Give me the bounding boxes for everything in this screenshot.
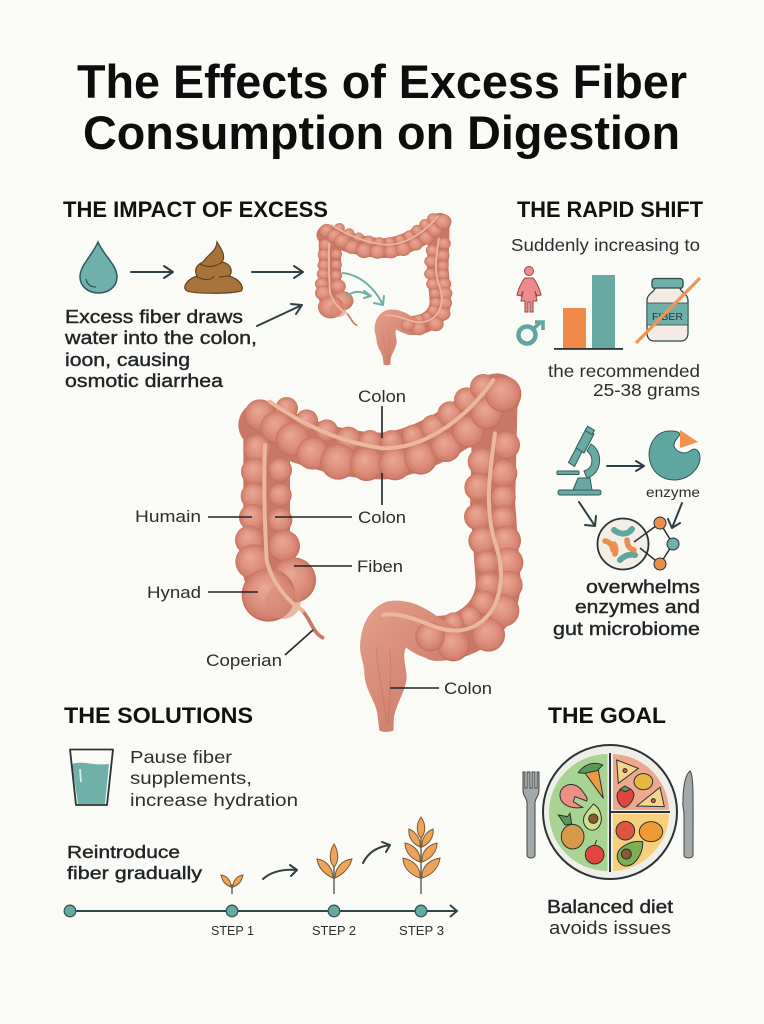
food: pizza slice two xyxy=(637,787,664,807)
text: reintroduce fiber: Reintroduce xyxy=(67,842,180,862)
text: recommended grams: the recommended xyxy=(548,361,700,381)
text: reintroduce fiber: fiber gradually xyxy=(67,863,202,883)
plate section: vegetables and protein xyxy=(549,754,608,871)
text: overwhelms enzymes: overwhelms xyxy=(586,576,700,597)
food: avocado xyxy=(617,841,643,866)
text: pause fiber supplements: supplements, xyxy=(130,768,252,788)
arrow: step 1 to step 2 xyxy=(263,865,297,879)
food: carrot xyxy=(578,763,603,798)
title xyxy=(77,55,687,159)
food: pizza slice xyxy=(617,760,638,783)
icon: enzyme xyxy=(649,430,700,480)
heading: the impact of excess: THE IMPACT OF EXCESS xyxy=(63,197,328,222)
food: strawberry xyxy=(617,786,634,807)
panel: enzyme and microbiome xyxy=(553,426,700,639)
text: excess fiber explanation: osmotic diarrhea xyxy=(65,370,224,391)
food: avocado half xyxy=(584,804,601,830)
timeline xyxy=(64,905,457,938)
food: tomato xyxy=(616,821,635,840)
label: hynad: Hynad xyxy=(147,583,201,602)
label: fiben: Fiben xyxy=(357,557,403,576)
heading: the rapid shift: THE RAPID SHIFT xyxy=(517,197,704,222)
label: colon middle xyxy=(275,473,406,527)
text: recommended grams: 25-38 grams xyxy=(593,380,700,400)
icon: fork xyxy=(523,772,539,858)
label: colon lower: Colon xyxy=(444,679,492,698)
food: pineapple xyxy=(558,813,584,849)
label: coperian xyxy=(206,630,313,670)
text: balanced diet: Balanced diet xyxy=(547,896,673,917)
timeline: STEP 3 xyxy=(399,924,444,938)
icon: gut microbiome xyxy=(598,517,679,570)
label: colon lower xyxy=(390,679,492,698)
icon: sprout xyxy=(221,875,243,894)
text: excess fiber explanation: ioon, causing xyxy=(65,349,190,370)
icon: balanced plate xyxy=(543,745,677,879)
icon: microscope xyxy=(557,426,601,495)
text: recommended grams xyxy=(548,361,700,400)
arrow: text to colon xyxy=(257,304,302,326)
icon: crossed-out fiber jar xyxy=(636,278,700,343)
timeline: STEP 1 xyxy=(211,924,254,938)
icon: water drop xyxy=(80,242,117,293)
icon: stool xyxy=(185,242,242,293)
text: overwhelms enzymes xyxy=(553,576,700,639)
text: pause fiber supplements: Pause fiber xyxy=(130,747,232,767)
arrow: stool to colon xyxy=(252,266,303,278)
food: apple xyxy=(585,840,604,864)
text: excess fiber explanation xyxy=(64,306,257,391)
label: coperian: Coperian xyxy=(206,651,282,670)
label: humain xyxy=(135,507,252,526)
arrow: microscope to microbiome xyxy=(579,502,596,526)
text: excess fiber explanation: Excess fiber draws xyxy=(65,306,243,327)
text: pause fiber supplements xyxy=(130,747,298,810)
text: pause fiber supplements: increase hydration xyxy=(130,790,298,810)
label: fiben xyxy=(294,557,403,576)
icon: female figure xyxy=(517,266,541,312)
icon: glass of water xyxy=(70,750,113,805)
title: The Effects of Excess Fiber xyxy=(77,55,687,108)
icon: young plant xyxy=(317,844,352,894)
text: suddenly increasing: Suddenly increasing to xyxy=(511,235,700,255)
text: overwhelms enzymes: enzymes and xyxy=(575,596,700,617)
plate section: fruit xyxy=(613,814,669,871)
label: colon top xyxy=(358,387,406,438)
panel: the rapid shift xyxy=(511,197,704,400)
arrow: step 2 to step 3 xyxy=(363,842,390,863)
small colon illustration xyxy=(315,213,452,365)
text: balanced diet xyxy=(547,896,673,938)
large colon diagram xyxy=(135,374,523,732)
icon: male symbol xyxy=(518,322,543,344)
food: lemon xyxy=(634,774,653,790)
panel: the goal xyxy=(523,703,693,938)
title: Consumption on Digestion xyxy=(83,106,680,159)
bar chart xyxy=(554,275,623,350)
text: overwhelms enzymes: gut microbiome xyxy=(553,618,700,639)
food: orange xyxy=(639,822,663,842)
arrow: enzyme to microbiome xyxy=(668,503,682,528)
label: colon top: Colon xyxy=(358,387,406,406)
plate section: grains xyxy=(613,754,669,810)
label: colon middle: Colon xyxy=(358,508,406,527)
icon: knife xyxy=(683,771,693,858)
arrow: drop to stool xyxy=(131,266,173,278)
label: hynad xyxy=(147,583,258,602)
icon: crossed-out fiber jar: FIBER xyxy=(652,311,683,323)
food: salmon xyxy=(560,785,587,808)
timeline: STEP 2 xyxy=(312,924,356,938)
text: excess fiber explanation: water into the colon, xyxy=(64,327,257,348)
arrows: water into colon xyxy=(343,273,384,305)
panel: the solutions xyxy=(64,703,457,938)
label: humain: Humain xyxy=(135,507,201,526)
icon: mature grain xyxy=(403,817,440,894)
panel: the impact of excess xyxy=(63,197,452,391)
heading: the solutions: THE SOLUTIONS xyxy=(64,703,253,728)
arrow: microscope to enzyme xyxy=(607,461,644,471)
heading: the goal: THE GOAL xyxy=(548,703,666,728)
label: enzyme: enzyme xyxy=(646,485,700,500)
text: balanced diet: avoids issues xyxy=(549,918,671,938)
text: reintroduce fiber xyxy=(67,842,202,883)
